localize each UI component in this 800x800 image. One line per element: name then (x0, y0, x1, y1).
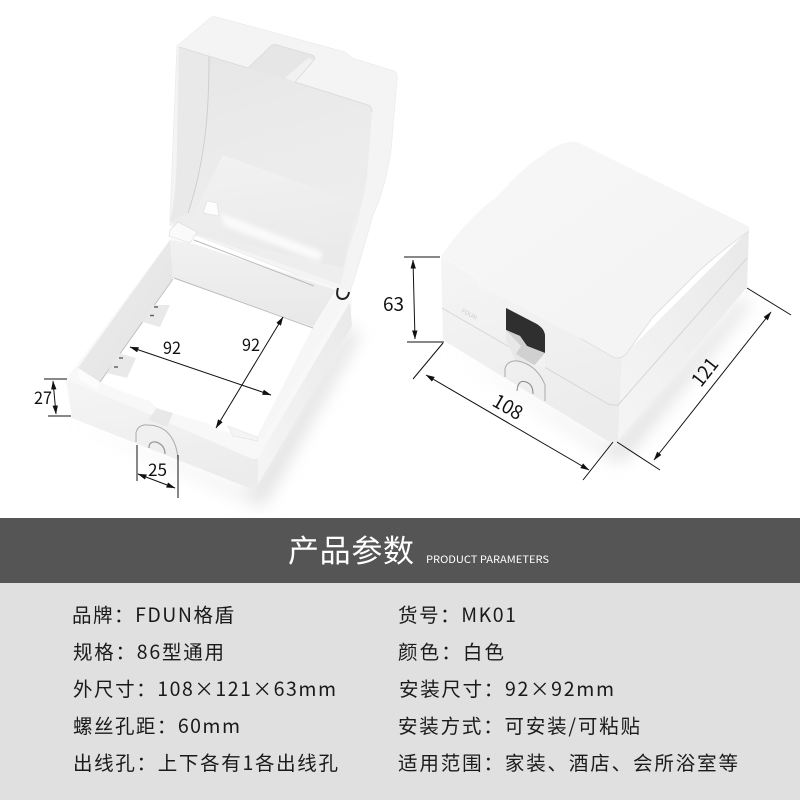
dimension: 92 width (130, 334, 271, 395)
lid clip (203, 201, 219, 216)
inner back wall (170, 240, 336, 327)
parameters right column: 颜色：白色 (398, 636, 504, 665)
lid lower band (186, 155, 357, 268)
cable tab (505, 361, 545, 401)
front wall (441, 256, 622, 442)
heading: English: PRODUCT PARAMETERS (426, 551, 549, 566)
parameters left column: 螺丝孔距：60mm (73, 710, 240, 739)
dimension: 63: 63 (383, 290, 404, 317)
parameters right column (398, 599, 738, 776)
logo mark: FDUN (460, 308, 478, 322)
hinge block (169, 222, 197, 243)
dimension: 27 (34, 379, 71, 416)
inner right wall (257, 296, 346, 440)
seam (442, 258, 747, 405)
lid left wall (170, 47, 208, 222)
lid outer shell (170, 17, 397, 292)
screw tabs (142, 305, 170, 327)
heading: Chinese: 产品参数 (288, 526, 414, 571)
socket opening (506, 308, 545, 368)
cable tab (136, 425, 178, 460)
dimension: 25 (137, 445, 178, 498)
closed box shadow (445, 295, 748, 462)
parameters right column: 适用范围：家装、酒店、会所浴室等 (398, 747, 738, 776)
lid highlight (220, 213, 322, 262)
floor (100, 278, 313, 437)
dimension: 92 depth: 92 (242, 331, 260, 356)
product photo: closed box (441, 142, 749, 462)
right wall (618, 230, 749, 440)
dimension: 121 (617, 288, 791, 470)
parameters left column (72, 599, 338, 776)
parameters right column: 安装方式：可安装/可粘贴 (398, 710, 640, 739)
dimension: 108: 108 (488, 387, 528, 426)
box base (66, 222, 352, 488)
dimension: 63 (383, 257, 444, 342)
dimension: 92 depth (216, 317, 283, 428)
base rim (66, 238, 352, 488)
dimension: 121: 121 (684, 351, 724, 392)
parameters panel background (0, 583, 800, 800)
front wall (67, 380, 268, 488)
heading band (0, 518, 800, 583)
product photo: open box (66, 17, 397, 505)
lid notch (250, 45, 315, 82)
parameters left column: 品牌：FDUN格盾 (72, 599, 234, 628)
parameters left column: 出线孔：上下各有1各出线孔 (73, 747, 338, 776)
parameters left column: 规格：86型通用 (73, 636, 224, 665)
parameters right column: 货号：MK01 (398, 599, 516, 628)
hinge pin (337, 288, 349, 299)
lid top surface (441, 142, 749, 358)
open lid (170, 17, 397, 292)
parameters left column: 外尺寸：108×121×63mm (73, 673, 336, 702)
right wall (258, 302, 352, 484)
dimension: 108 (413, 343, 613, 480)
corner blocks (78, 368, 100, 390)
dimension: 25: 25 (148, 456, 167, 481)
inner left wall (78, 240, 173, 382)
dimension: 92 width: 92 (163, 334, 181, 359)
rim notch (148, 402, 173, 427)
lid inside panel (170, 45, 372, 285)
dimension: 27: 27 (34, 384, 52, 409)
parameters right column: 安装尺寸：92×92mm (399, 673, 614, 702)
open box shadow (75, 325, 358, 505)
